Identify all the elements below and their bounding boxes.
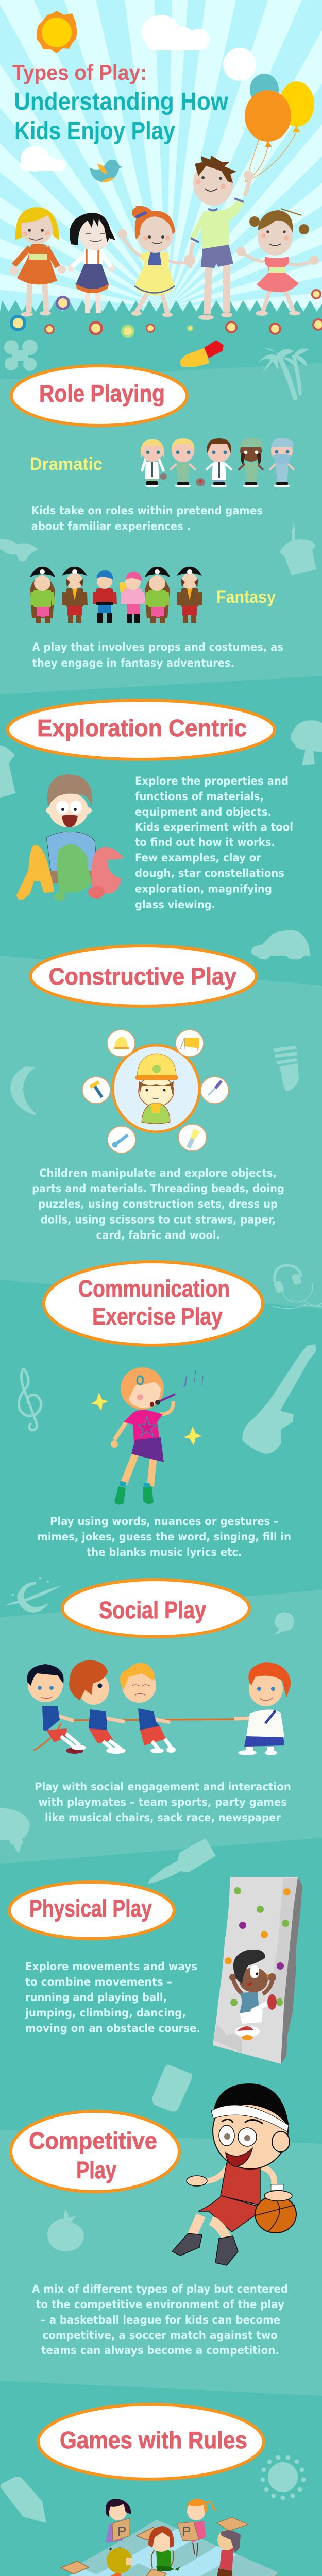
body text: exploration: dough, star constellations [135, 867, 284, 879]
icon: butterfly [0, 539, 38, 562]
kid: red-haired girl in green [148, 2526, 180, 2571]
body text: exploration: functions of materials, [135, 790, 264, 803]
icon: light bulb [273, 1046, 299, 1091]
body text: competitive: competitive, a soccer match against two [42, 2329, 278, 2342]
body text: dramatic [31, 504, 263, 533]
icon: music notes [182, 1370, 203, 1386]
body text: communication: the blanks music lyrics etc. [87, 1546, 242, 1558]
body text: exploration: Kids experiment with a tool [135, 821, 293, 834]
kid: girl in pink with P card [177, 2499, 216, 2556]
section heading: Competitive Play [11, 2111, 179, 2192]
body text: constructive: Children manipulate and explore objects, [39, 1167, 277, 1179]
body text: fantasy [32, 641, 283, 669]
flowers [10, 289, 322, 338]
body text: communication: Play using words, nuances or gestures – [50, 1515, 279, 1528]
section heading: Social Play: Social Play [99, 1597, 206, 1623]
bubble: screwdriver [201, 1077, 229, 1104]
icon: palm trees [258, 348, 309, 401]
icon: eraser [152, 2064, 192, 2112]
body text: constructive: card, fabric and wool. [96, 1229, 220, 1242]
icon: treble clef [19, 1368, 41, 1430]
icon: thought cloud [0, 1808, 30, 1852]
section heading: Communication Exercise Play: Communication [78, 1275, 230, 1302]
bubble: torch [178, 1124, 206, 1151]
icon: guitar [242, 1344, 316, 1454]
body text: exploration: equipment and objects. [135, 806, 272, 818]
section heading: Physical Play [9, 1882, 174, 1939]
body text: exploration [135, 775, 293, 911]
illustration: boy playing basketball [172, 2083, 296, 2265]
icon: headphones [273, 1265, 322, 1309]
body text: fantasy: they engage in fantasy adventures. [32, 657, 234, 669]
icon: pencil [1, 2477, 46, 2523]
body text: constructive [32, 1167, 284, 1242]
body text: physical: running and playing ball, [25, 1991, 167, 2004]
body text: social [35, 1781, 291, 1824]
body text: physical: moving on an obstacle course. [25, 2022, 200, 2035]
body text: communication: mimes, jokes, guess the word, singing, fill in [37, 1531, 291, 1543]
section heading: Communication Exercise Play [44, 1262, 263, 1345]
icon: bird [90, 160, 123, 182]
clouds [20, 15, 256, 172]
body text: physical: to combine movements – [25, 1976, 172, 1988]
section heading: Role Playing [11, 366, 187, 426]
section heading: Exploration Centric: Exploration Centric [37, 715, 247, 741]
illustration: kids on letter board [49, 2499, 277, 2576]
body text: fantasy: A play that involves props and costumes, as [32, 641, 283, 653]
body text: communication [37, 1515, 291, 1558]
icon: tree [291, 720, 322, 765]
body text: constructive: dolls, using scissors to cut straws, paper, [40, 1214, 276, 1226]
icon: dotted sun [261, 2455, 306, 2500]
title: Kids Enjoy Play [14, 117, 175, 145]
body text: exploration: Explore the properties and [135, 775, 289, 787]
tiles [61, 2527, 255, 2576]
body text: exploration: Few examples, clay or [135, 852, 262, 864]
body text: competitive: teams can always become a competition. [41, 2344, 279, 2357]
icon: t-shirt [0, 745, 15, 798]
bubble: wrench [108, 1126, 135, 1153]
kid: girl in purple with P card [106, 2499, 131, 2550]
icon: balloons [245, 74, 314, 182]
body text: dramatic: about familiar experiences . [31, 520, 191, 533]
body text: dramatic: Kids take on roles within pretend games [31, 504, 263, 517]
illustration: boy with clay letters ABC [16, 774, 124, 901]
icon: faint clover [4, 340, 38, 371]
icon: saturn [5, 1577, 62, 1613]
body text: social: with playmates – team sports, party games [38, 1796, 287, 1808]
body text: physical: jumping, climbing, dancing, [25, 2007, 186, 2019]
icon: car [251, 930, 310, 959]
kid: black-haired girl [67, 213, 115, 313]
body text: constructive: parts and materials. Threading beads, doing [32, 1182, 284, 1195]
icon: medical bag [196, 478, 205, 486]
bubble: sign board [176, 1030, 204, 1057]
title: Types of Play: [12, 60, 147, 84]
illustration: pirate kids [30, 567, 202, 623]
bubble: helmet [107, 1030, 135, 1057]
section heading: Games with Rules [38, 2404, 264, 2479]
kid: girl in purple with P card: P [117, 2523, 126, 2539]
section heading: Role Playing: Role Playing [39, 380, 165, 407]
icon: paint brush [148, 1838, 216, 1884]
body text: competitive [32, 2283, 288, 2357]
section heading: Exploration Centric [8, 700, 275, 759]
title: Understanding How [14, 88, 229, 115]
section heading: Competitive Play: Competitive [29, 2127, 157, 2154]
body text: exploration: to find out how it works. [135, 836, 275, 849]
icon: speech bubble [274, 1613, 294, 1635]
section heading: Games with Rules: Games with Rules [60, 2427, 247, 2453]
body text: exploration: glass viewing. [135, 899, 215, 911]
icon: cupcake [280, 523, 316, 575]
body text: competitive: A mix of different types of play but centered [32, 2283, 288, 2295]
kid: red-haired girl in yellow dress [118, 206, 191, 317]
subheading: Fantasy: Fantasy [216, 587, 276, 607]
icon: sun [37, 11, 77, 53]
bubble: hammer [82, 1077, 110, 1104]
kid: tall boy with balloons [184, 156, 253, 320]
body text: exploration: exploration, magnifying [135, 883, 272, 895]
body text: competitive: to the competitive environment of the play [36, 2298, 284, 2311]
body text: physical: Explore movements and ways [25, 1960, 197, 1973]
body text: social: like musical chairs, sack race, newspaper [45, 1811, 281, 1824]
illustration: climbing wall with boy [213, 1877, 302, 2064]
header sky with rays [0, 0, 322, 330]
section heading: Physical Play: Physical Play [29, 1895, 152, 1922]
section heading: Competitive Play: Play [76, 2157, 116, 2183]
body text: social: Play with social engagement and interaction [35, 1781, 291, 1793]
section heading: Communication Exercise Play: Exercise Play [92, 1303, 223, 1330]
kid: girl in pink dress [236, 209, 319, 316]
body text: competitive: – a basketball league for kids can become [41, 2314, 280, 2326]
kid: boy with Y card on head [213, 2517, 248, 2576]
section heading: Social Play [62, 1580, 249, 1637]
illustration: builder boy with tool bubbles [82, 1030, 229, 1153]
body text: physical [25, 1960, 200, 2035]
illustration: singing girl [91, 1367, 203, 1505]
subheading: Dramatic: Dramatic [30, 454, 103, 474]
kid: girl in pink with P card: P [182, 2523, 191, 2539]
body text: constructive: puzzles, using construction sets, dress up [38, 1198, 278, 1210]
section heading: Constructive Play [30, 946, 257, 1006]
illustration: doctor kids [141, 438, 294, 487]
illustration: tug of war [27, 1660, 291, 1755]
title [12, 60, 229, 145]
icon: apple [47, 2209, 84, 2251]
section heading: Constructive Play: Constructive Play [48, 963, 236, 990]
grass ground [0, 300, 322, 380]
kid: yellow-haired boy from behind [98, 2548, 132, 2576]
kid: blonde girl in orange dress [9, 207, 66, 316]
icon: crescent [10, 1066, 36, 1115]
icon: crayon [180, 340, 224, 367]
